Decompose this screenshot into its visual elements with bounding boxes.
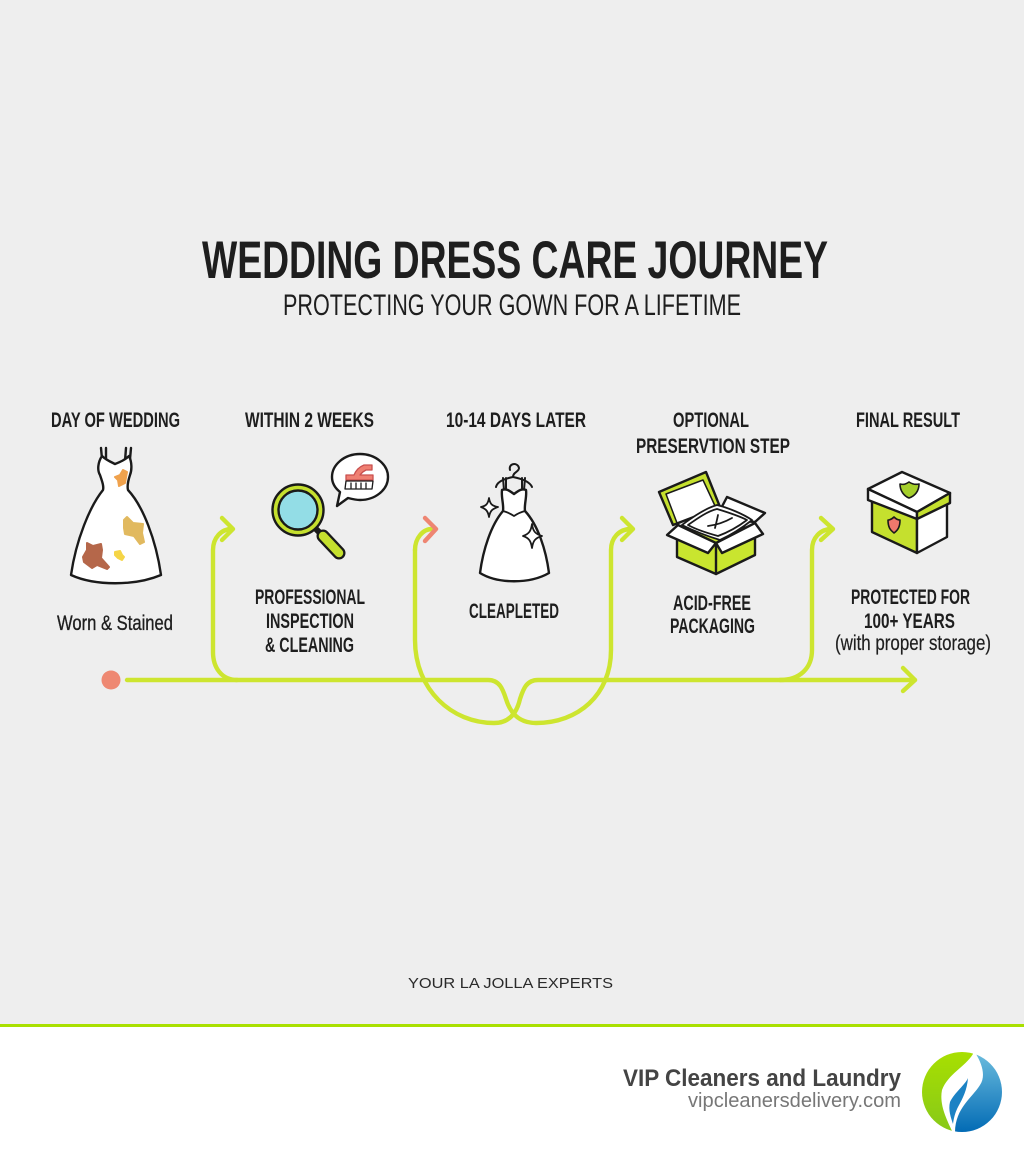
description: ACID-FREE	[673, 592, 751, 615]
description: & CLEANING	[265, 634, 354, 657]
sparkle left	[481, 498, 498, 517]
panel: step 5 final result	[835, 409, 991, 655]
panel: step 1 day of wedding	[51, 409, 180, 635]
footer panel	[0, 1024, 1024, 1154]
heading	[636, 409, 790, 458]
heading: FINAL RESULT	[856, 409, 960, 432]
icon: clean dress on hanger	[480, 464, 549, 581]
start dot	[102, 670, 120, 690]
website: vipcleanersdelivery.com	[688, 1090, 901, 1112]
description: PROFESSIONAL	[255, 586, 365, 609]
tagline: YOUR LA JOLLA EXPERTS	[408, 975, 613, 992]
icon: speech bubble with brush	[332, 454, 388, 506]
description: PACKAGING	[670, 615, 755, 638]
icon: logo	[920, 1050, 1004, 1134]
caption: Worn & Stained	[57, 612, 173, 635]
subtitle: PROTECTING YOUR GOWN FOR A LIFETIME	[283, 289, 741, 322]
description: INSPECTION	[266, 610, 354, 633]
description	[255, 586, 365, 657]
heading: OPTIONAL	[673, 409, 749, 432]
description	[670, 592, 755, 638]
panel: step 4 optional preservation	[636, 409, 790, 638]
description	[835, 586, 991, 655]
stain: yellow	[115, 551, 124, 560]
stain: orange	[115, 470, 127, 486]
icon: protected box	[868, 472, 950, 553]
stain: tan	[124, 517, 144, 544]
shield on lid	[900, 482, 919, 498]
heading: 10-14 DAYS LATER	[446, 409, 586, 432]
description: 100+ YEARS	[864, 610, 955, 633]
stain: brown	[83, 543, 109, 569]
heading: PRESERVTION STEP	[636, 435, 790, 458]
icon: magnifying glass	[272, 484, 339, 553]
shield on side	[888, 517, 900, 533]
description: (with proper storage)	[835, 632, 991, 655]
brand name: VIP Cleaners and Laundry	[623, 1065, 902, 1092]
journey flow arrows	[127, 518, 915, 723]
heading: WITHIN 2 WEEKS	[245, 409, 374, 432]
panel: step 2 within 2 weeks	[245, 409, 388, 657]
sparkle right	[523, 524, 542, 548]
heading: DAY OF WEDDING	[51, 409, 180, 432]
icon: open box	[659, 472, 765, 574]
icon: stained dress	[71, 448, 161, 583]
caption: CLEAPLETED	[469, 600, 559, 623]
panel: step 3 10-14 days later	[446, 409, 586, 623]
